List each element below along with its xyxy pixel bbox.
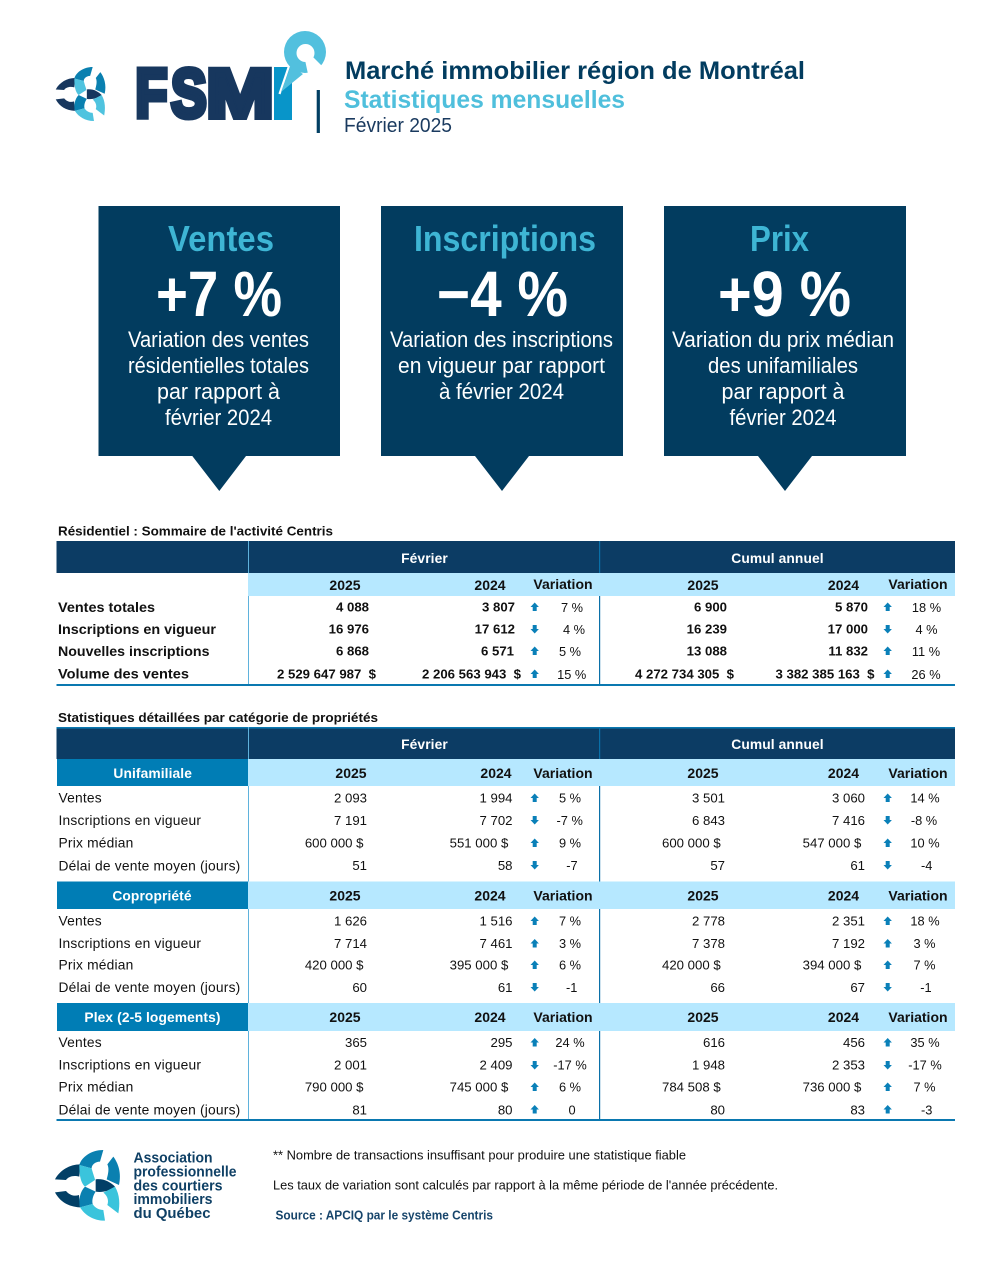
section: Copropriété: 61 (498, 980, 512, 995)
section: Plex: 2 409 (479, 1058, 512, 1073)
section: Copropriété: Variation (888, 888, 948, 904)
section: Plex: 0 (568, 1102, 576, 1117)
section: Copropriété: 2025 (687, 888, 719, 904)
row: Ventes totales: 3 807 (482, 600, 515, 614)
association name: du Québec (134, 1206, 210, 1222)
section: Plex: 7 % (913, 1080, 936, 1095)
section: Unifamiliale: 6 843 (692, 813, 725, 828)
section: Plex: 456 (843, 1035, 865, 1050)
panel: Ventes: +7 % (156, 258, 282, 330)
row: Inscriptions en vigueur (58, 622, 938, 637)
panel: Inscriptions: −4 % (437, 258, 568, 330)
panel: Prix: par rapport à (722, 379, 845, 404)
section: Copropriété: 420 000 $ (662, 958, 721, 972)
section: Unifamiliale: Unifamiliale (113, 766, 192, 781)
section: Unifamiliale: 7 416 (832, 813, 865, 828)
section: Plex: 6 % (559, 1080, 581, 1095)
icon: triskelion logo (56, 67, 105, 121)
row: Volume des ventes (58, 666, 941, 682)
logo: FSMI: S (171, 55, 207, 132)
footnotes: Les taux de variation sont calculés par rapport à la même période de l'année précédente. (273, 1178, 778, 1192)
section: Plex: 24 % (555, 1035, 585, 1050)
section: Plex: Délai de vente moyen (jours) (58, 1102, 240, 1117)
section: Plex: 365 (345, 1035, 367, 1050)
section: Plex: 736 000 $ (803, 1080, 862, 1095)
section: Plex: Ventes (58, 1035, 102, 1050)
section: Unifamiliale: -8 % (911, 813, 937, 828)
section: Plex: 2025 (687, 1009, 719, 1025)
panel: Ventes: Ventes (168, 218, 274, 259)
section: Copropriété: 2 778 (692, 914, 725, 928)
logo: FSMI: M (206, 55, 274, 132)
section: Unifamiliale: 600 000 $ (305, 836, 364, 850)
section: Unifamiliale: 547 000 $ (803, 836, 862, 850)
row: Inscriptions en vigueur: 16 239 (687, 622, 727, 636)
row: Inscriptions en vigueur: 4 % (563, 622, 585, 637)
section: Unifamiliale: 7 191 (334, 813, 367, 828)
row: Ventes totales: 6 900 (694, 600, 727, 614)
section: Unifamiliale: 2024 (828, 765, 859, 781)
section: Plex: 2024 (828, 1009, 859, 1025)
table: Centris activity summary: Variation (888, 576, 948, 592)
panel: Prix: des unifamiliales (708, 353, 858, 378)
section: Copropriété: 420 000 $ (305, 958, 364, 972)
section: Unifamiliale: 10 % (910, 836, 940, 850)
section: Plex: -17 % (553, 1058, 587, 1073)
row: Ventes totales: Ventes totales (58, 600, 155, 615)
section: Unifamiliale: 2025 (335, 765, 367, 781)
association name: professionnelle (134, 1164, 236, 1180)
date: Février 2025 (344, 115, 452, 137)
section: Copropriété: -1 (566, 980, 577, 995)
section: Copropriété: 6 % (559, 958, 581, 972)
section: Unifamiliale: 14 % (910, 790, 940, 806)
panel: Inscriptions: en vigueur par rapport (398, 353, 605, 378)
table: Centris activity summary: Cumul annuel (731, 551, 824, 566)
section: Unifamiliale: -7 (566, 858, 578, 873)
section: Unifamiliale: Variation (533, 765, 593, 781)
footnotes: Source : APCIQ par le système Centris (276, 1208, 493, 1222)
row: Volume des ventes: 2 206 563 943 $ (422, 666, 522, 682)
table: detailed statistics by property category: Février (401, 737, 448, 752)
section: Copropriété: 7 378 (692, 936, 725, 951)
section: Plex: 2 353 (832, 1058, 865, 1073)
section: Copropriété: 66 (710, 980, 725, 995)
row: Volume des ventes: 4 272 734 305 $ (635, 666, 735, 682)
section: Copropriété: 7 % (913, 958, 936, 972)
section: Plex: -17 % (908, 1058, 942, 1073)
section: Plex: Prix médian (58, 1080, 134, 1095)
title: Marché immobilier région de Montréal (345, 57, 805, 85)
panel: Prix: +9 % (718, 258, 851, 330)
table: Centris activity summary: 2024 (474, 577, 506, 593)
section: Plex: 80 (498, 1102, 512, 1117)
section: Plex: 790 000 $ (305, 1080, 364, 1095)
row: Nouvelles inscriptions (58, 644, 940, 659)
row: Nouvelles inscriptions: 11 832 (828, 644, 868, 658)
panel: Inscriptions: Inscriptions (414, 218, 596, 259)
row: Volume des ventes: Volume des ventes (58, 666, 189, 682)
section: Plex: Inscriptions en vigueur (58, 1058, 201, 1073)
row: Volume des ventes: 2 529 647 987 $ (277, 666, 377, 682)
section: Unifamiliale: 551 000 $ (450, 836, 509, 850)
section: Unifamiliale: 2 093 (334, 790, 367, 806)
section: Unifamiliale: Délai de vente moyen (jours) (58, 858, 240, 873)
section: Unifamiliale: 1 994 (479, 790, 512, 806)
section: Copropriété: 2 351 (832, 914, 865, 928)
panel: Prix: Variation du prix médian (672, 327, 894, 352)
section: Copropriété: 7 192 (832, 936, 865, 951)
section: Unifamiliale (57, 759, 955, 873)
section: Unifamiliale: Prix médian (58, 836, 134, 851)
footer logo: APCIQ (55, 1150, 237, 1222)
footnotes: ** Nombre de transactions insuffisant pour produire une statistique fiable (273, 1148, 686, 1162)
section: Plex: Variation (888, 1009, 948, 1025)
panel: Inscriptions: à février 2024 (439, 379, 564, 404)
row: Volume des ventes: 26 % (911, 667, 941, 682)
section: Plex: 745 000 $ (450, 1080, 509, 1095)
section: Plex: 1 948 (692, 1058, 725, 1073)
section: Unifamiliale: 51 (352, 858, 367, 873)
panel: Ventes: par rapport à (157, 379, 281, 404)
section: Unifamiliale: 2025 (687, 765, 719, 781)
row: Nouvelles inscriptions: 6 571 (481, 644, 514, 658)
section: Copropriété: Variation (533, 888, 593, 904)
section: Copropriété: 3 % (913, 936, 936, 951)
heading: summary table: Résidentiel : Sommaire de l'activité Centris (58, 524, 333, 538)
section: Copropriété: Prix médian (58, 958, 134, 972)
section: Plex: -3 (921, 1102, 932, 1117)
panel: Prix: Prix (750, 218, 809, 259)
section: Copropriété: 1 516 (479, 914, 512, 928)
panel: Prix (664, 206, 906, 491)
section: Unifamiliale: 600 000 $ (662, 836, 721, 850)
section: Plex: Variation (533, 1009, 593, 1025)
row: Inscriptions en vigueur: 17 000 (828, 622, 868, 636)
panel: Prix: février 2024 (730, 405, 836, 430)
logo: FSMI: F (135, 55, 167, 132)
panel: Inscriptions (381, 206, 623, 491)
row: Ventes totales: 18 % (912, 600, 941, 615)
panel: Inscriptions: Variation des inscriptions (390, 327, 613, 352)
row: Ventes totales: 4 088 (336, 600, 369, 614)
table: Centris activity summary: 2024 (828, 577, 859, 593)
section: Copropriété: -1 (920, 980, 932, 995)
row: Nouvelles inscriptions: 5 % (559, 644, 581, 659)
association name (134, 1151, 236, 1222)
section: Plex: 80 (710, 1102, 725, 1117)
section: Unifamiliale: 61 (850, 858, 865, 873)
section: Plex: 81 (352, 1102, 367, 1117)
row: Volume des ventes: 3 382 385 163 $ (776, 666, 875, 682)
section: Unifamiliale: 7 702 (479, 813, 512, 828)
section: Unifamiliale: Variation (888, 765, 948, 781)
section: Plex: Plex (2-5 logements) (84, 1010, 221, 1025)
section: Copropriété: 2025 (329, 888, 361, 904)
section: Plex: 784 508 $ (662, 1080, 721, 1095)
section: Copropriété: 2024 (474, 888, 506, 904)
table: Centris activity summary: 2025 (329, 577, 361, 593)
section: Unifamiliale: Ventes (58, 790, 102, 806)
subtitle: Statistiques mensuelles (344, 86, 625, 114)
section: Copropriété: Inscriptions en vigueur (58, 936, 201, 951)
row: Inscriptions en vigueur: Inscriptions en vigueur (58, 622, 217, 637)
section: Copropriété: Délai de vente moyen (jours) (58, 980, 240, 995)
section: Copropriété: Copropriété (112, 888, 192, 904)
table: Centris activity summary: 2025 (687, 577, 719, 593)
row: Inscriptions en vigueur: 17 612 (475, 622, 515, 636)
section: Unifamiliale: 5 % (559, 790, 581, 806)
section: Copropriété: 60 (352, 980, 367, 995)
section: Plex: 83 (850, 1102, 865, 1117)
logo: FSMI (135, 31, 328, 132)
table: detailed statistics by property category: Cumul annuel (731, 737, 824, 752)
section: Copropriété: 7 % (559, 914, 581, 928)
heading: detailed table: Statistiques détaillées par catégorie de propriétés (58, 710, 378, 725)
association name: des courtiers (134, 1178, 222, 1194)
section: Plex: 2024 (474, 1009, 506, 1025)
table: detailed statistics by property category (56, 727, 955, 1121)
section: Plex: 2025 (329, 1009, 361, 1025)
header: logos and title (56, 31, 805, 137)
row: Nouvelles inscriptions: Nouvelles inscriptions (58, 644, 210, 659)
panel: Ventes: résidentielles totales (128, 353, 309, 378)
row: Inscriptions en vigueur: 16 976 (329, 622, 369, 636)
section: Unifamiliale: 2024 (480, 765, 512, 781)
footnotes (273, 1148, 778, 1222)
panel: Ventes: Variation des ventes (128, 327, 309, 352)
section: Copropriété: 2024 (828, 888, 859, 904)
row: Ventes totales: 7 % (561, 600, 583, 615)
section: Unifamiliale: 3 060 (832, 790, 865, 806)
divider bar (317, 90, 320, 133)
section: Unifamiliale: -4 (921, 858, 932, 873)
row: Volume des ventes: 15 % (557, 667, 586, 682)
table: Centris activity summary: Février (401, 551, 448, 566)
section: Unifamiliale: 3 501 (692, 790, 725, 806)
section: Copropriété: 67 (850, 980, 865, 995)
panel: Ventes: février 2024 (165, 405, 272, 430)
section: Plex: 616 (703, 1035, 725, 1050)
association name: Association (134, 1151, 212, 1167)
section: Plex: 35 % (910, 1035, 940, 1050)
row: Ventes totales: 5 870 (835, 600, 868, 614)
row: Nouvelles inscriptions: 6 868 (336, 644, 369, 658)
section: Copropriété: 3 % (559, 936, 581, 951)
table: Centris activity summary: Variation (533, 576, 593, 592)
section: Plex: 295 (490, 1035, 512, 1050)
table: Centris activity summary (56, 541, 955, 686)
section: Plex: 2 001 (334, 1058, 367, 1073)
row: Nouvelles inscriptions: 13 088 (687, 644, 727, 658)
section: Unifamiliale: 9 % (559, 836, 581, 850)
section: Copropriété: 395 000 $ (450, 958, 509, 972)
section: Unifamiliale: -7 % (557, 813, 583, 828)
association name: immobiliers (134, 1192, 212, 1208)
section: Copropriété: 18 % (910, 914, 940, 928)
section: Copropriété (57, 882, 955, 995)
section: Copropriété: Ventes (58, 914, 102, 928)
section: Copropriété: 7 714 (334, 936, 367, 951)
section: Copropriété: 394 000 $ (803, 958, 862, 972)
icon: triskelion logo (55, 1150, 120, 1221)
section: Copropriété: 1 626 (334, 914, 367, 928)
row: Nouvelles inscriptions: 11 % (912, 644, 940, 659)
section: Unifamiliale: Inscriptions en vigueur (58, 813, 201, 828)
row: Ventes totales (58, 600, 941, 615)
section: Unifamiliale: 57 (710, 858, 725, 873)
section: Copropriété: 7 461 (479, 936, 512, 951)
panel: Ventes (98, 206, 340, 491)
row: Inscriptions en vigueur: 4 % (915, 622, 938, 637)
section: Unifamiliale: 58 (498, 858, 512, 873)
section: Plex (57, 1003, 955, 1117)
